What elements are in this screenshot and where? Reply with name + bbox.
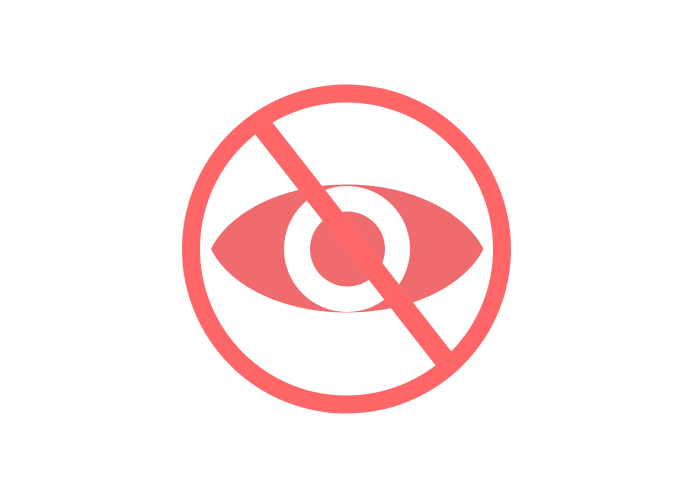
eye outline <box>211 184 484 312</box>
iris ring <box>284 186 410 312</box>
diagonal slash <box>257 119 451 368</box>
prohibition ring <box>191 94 502 404</box>
pupil <box>310 212 385 286</box>
